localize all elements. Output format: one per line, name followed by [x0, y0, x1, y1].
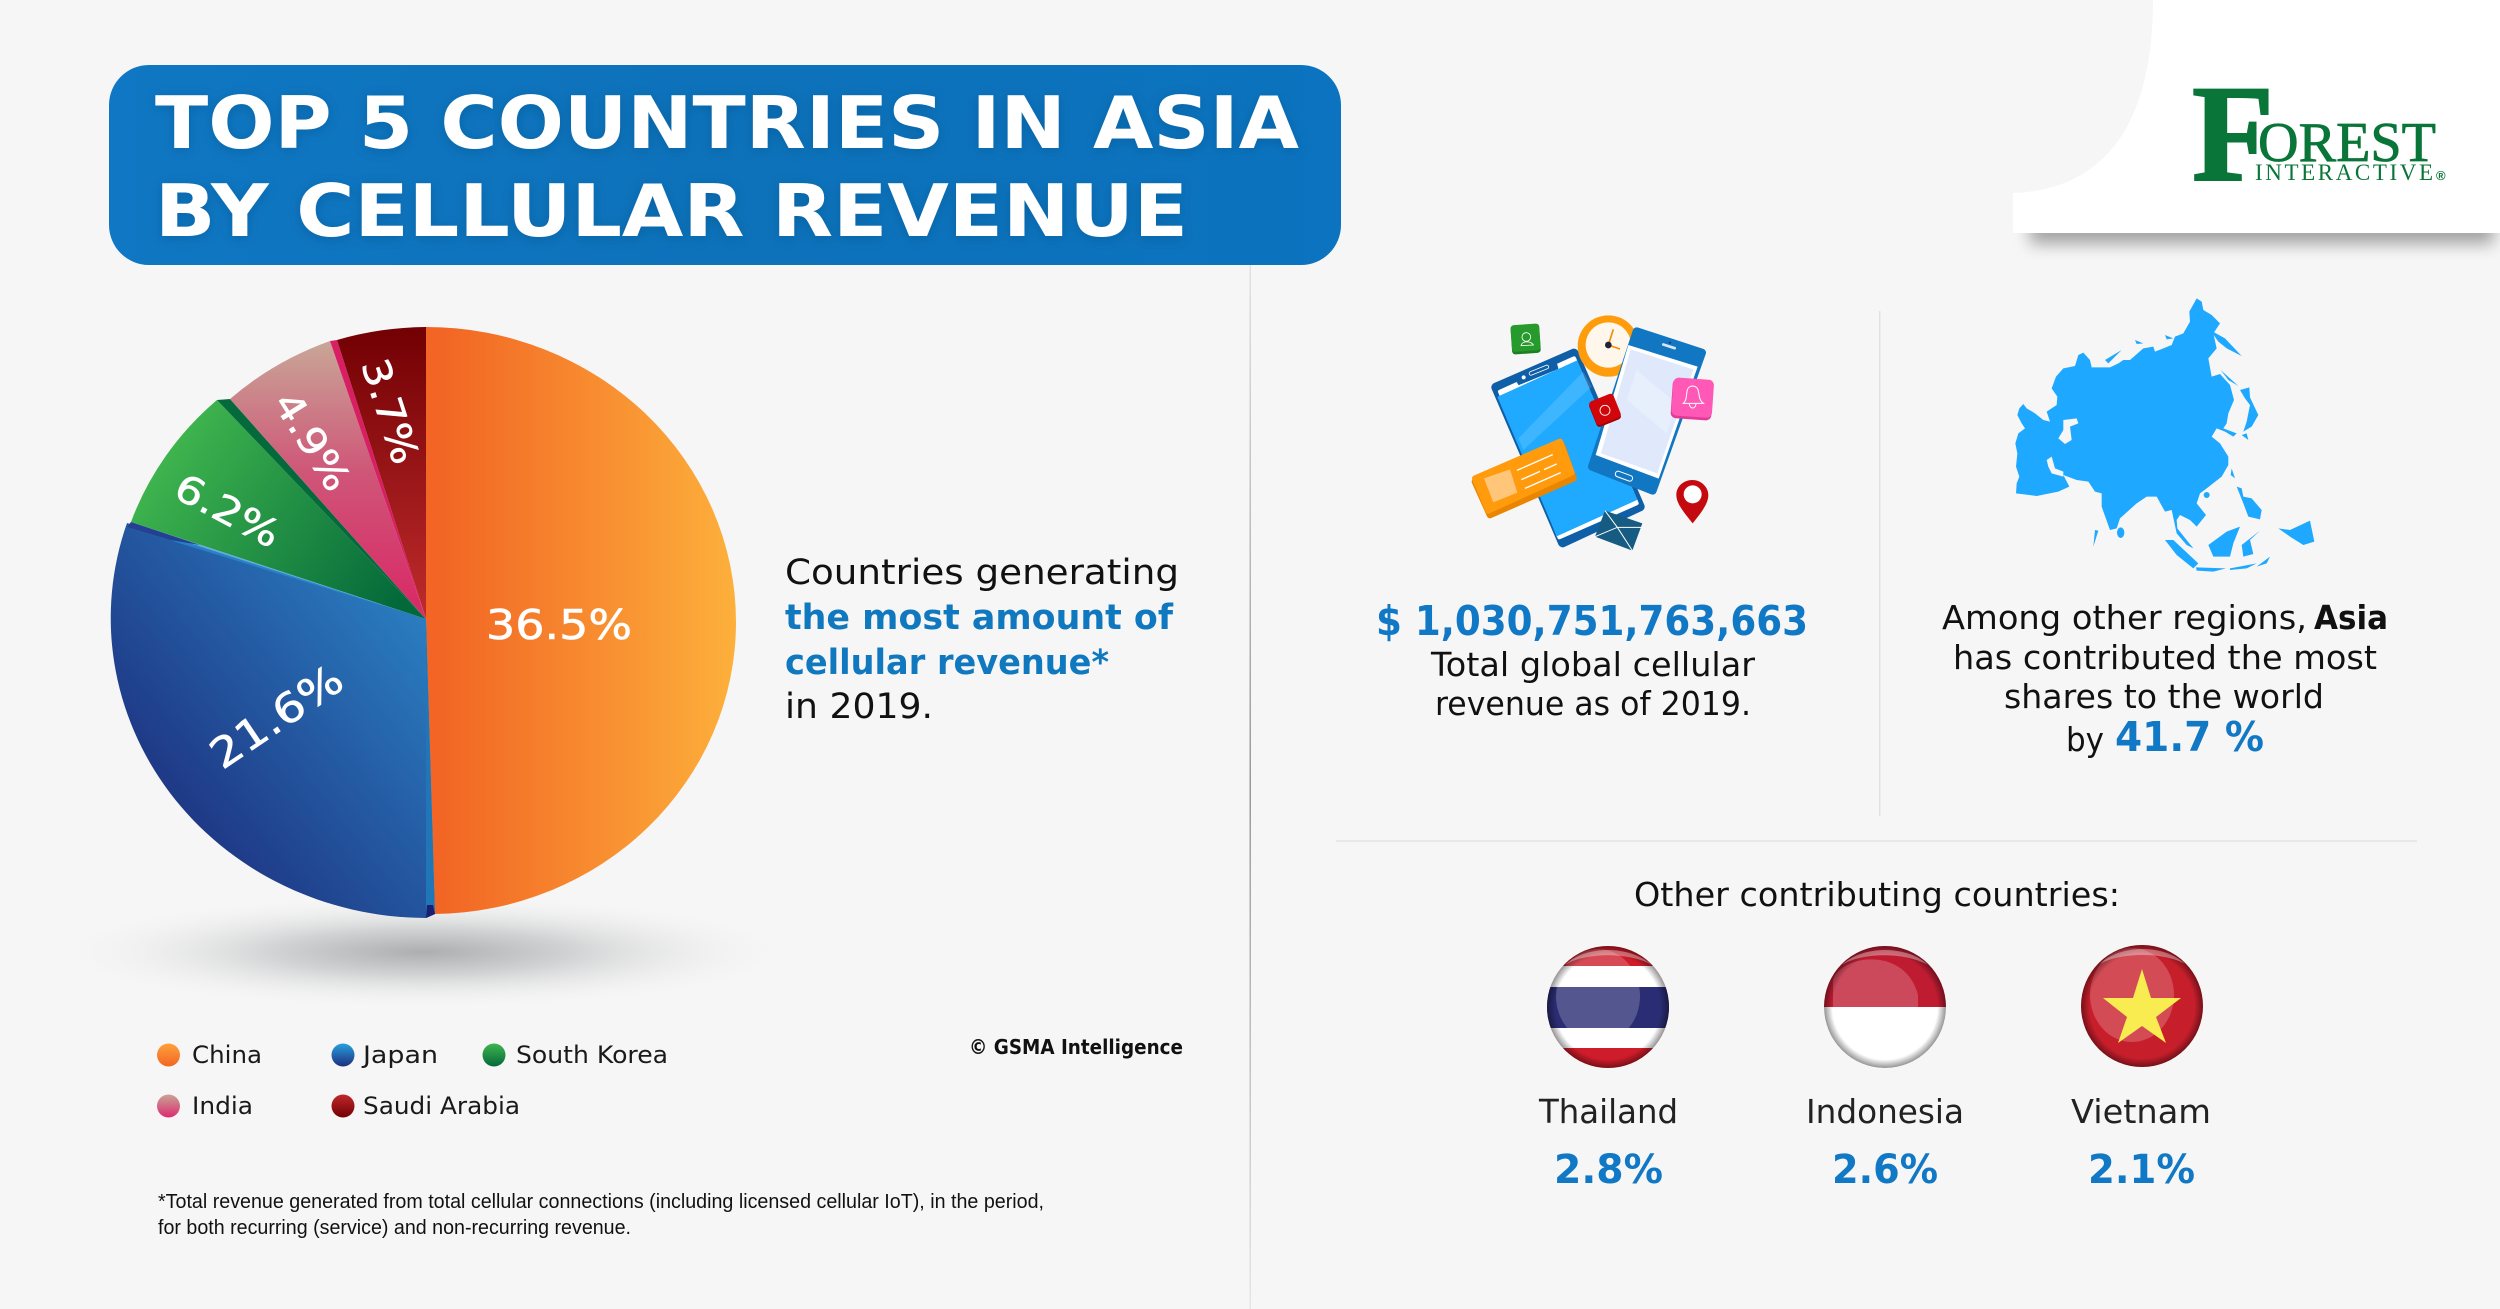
flag: Thailand — [1547, 946, 1669, 1068]
pie labels: 36.5% — [486, 601, 632, 649]
pie labels: 3.7% — [352, 353, 428, 469]
icon: smartphones with apps — [1475, 315, 1714, 551]
Thailand stat: 2.8% — [1554, 1147, 1663, 1193]
legend: Japan: Japan — [361, 1041, 438, 1069]
clock — [1578, 315, 1639, 377]
title text: BY CELLULAR REVENUE — [155, 169, 1188, 253]
title banner — [109, 65, 1341, 265]
total revenue stat — [1376, 597, 1808, 723]
Asia share stat: 41.7 % — [2115, 713, 2264, 761]
legend: India — [157, 1092, 253, 1120]
slice: India 4.9% — [230, 340, 426, 619]
slice: Japan 21.6% — [111, 522, 435, 918]
legend: China: China — [192, 1041, 262, 1069]
legend: Saudi Arabia: Saudi Arabia — [363, 1092, 520, 1120]
chart caption — [785, 553, 1179, 727]
slice: Saudi Arabia 3.7% — [337, 327, 426, 619]
legend: China — [157, 1041, 262, 1069]
total revenue stat: $ 1,030,751,763,663 — [1376, 597, 1808, 645]
title text — [155, 81, 1299, 253]
vertical divider between global revenue and Asia stats — [1879, 311, 1880, 816]
chart caption: in 2019. — [785, 687, 933, 727]
Asia share stat: shares to the world — [2004, 677, 2324, 716]
country labels and values — [1538, 1092, 2211, 1193]
total revenue stat: revenue as of 2019. — [1435, 684, 1751, 723]
icon: map of Asia — [2015, 298, 2314, 572]
legend: South Korea: South Korea — [516, 1041, 668, 1069]
envelope — [1595, 511, 1642, 551]
title text: TOP 5 COUNTRIES IN ASIA — [155, 81, 1299, 165]
logo: Forest Interactive: ® — [2436, 168, 2446, 183]
logo: Forest Interactive: F — [2192, 57, 2274, 210]
other countries heading: Other contributing countries: — [1634, 875, 2120, 914]
slice: South Korea 6.2% — [131, 399, 426, 619]
Asia share stat: by — [2066, 720, 2104, 759]
pie labels: 6.2% — [167, 465, 288, 557]
Asia share stat — [1942, 598, 2388, 761]
Indonesia stat: 2.6% — [1832, 1147, 1938, 1193]
pink bell tile — [1670, 377, 1714, 421]
right phone — [1592, 331, 1702, 491]
Indonesia stat: Indonesia — [1806, 1092, 1964, 1131]
Thailand stat — [1538, 1092, 1678, 1193]
pie chart — [111, 327, 736, 918]
flag: Vietnam — [2080, 940, 2205, 1070]
pie labels: 4.9% — [265, 384, 359, 499]
pie labels: 21.6% — [201, 655, 352, 779]
legend: India: India — [192, 1092, 253, 1120]
green contact tile — [1510, 323, 1541, 355]
Vietnam stat — [2071, 1092, 2211, 1193]
Thailand stat: Thailand — [1538, 1092, 1678, 1131]
location pin — [1676, 480, 1708, 523]
total revenue stat: Total global cellular — [1430, 645, 1755, 684]
legend — [157, 1041, 668, 1120]
vertical divider between left and right halves — [1250, 263, 1251, 1309]
logo panel — [2013, 0, 2500, 244]
footnote: *Total revenue generated from total cellular connections (including licensed cellular IoT), in the period, — [158, 1191, 1044, 1213]
chart caption: the most amount of — [785, 598, 1174, 638]
Asia share stat: has contributed the most — [1953, 638, 2377, 677]
pie chart shadow — [48, 894, 798, 1010]
chart caption: cellular revenue* — [785, 643, 1109, 683]
Vietnam stat: 2.1% — [2088, 1147, 2195, 1193]
left phone — [1496, 353, 1640, 543]
flag: Indonesia — [1824, 946, 1946, 1068]
red camera tile — [1588, 393, 1622, 428]
pie labels — [167, 353, 632, 779]
Asia share stat: Asia — [2314, 598, 2388, 637]
footnote — [158, 1191, 1044, 1239]
legend: Japan — [332, 1041, 438, 1069]
Indonesia stat — [1806, 1092, 1964, 1193]
logo: Forest Interactive — [2192, 57, 2446, 210]
slice: China 36.5% — [426, 327, 736, 914]
Asia share stat: Among other regions, — [1942, 598, 2307, 637]
Vietnam stat: Vietnam — [2071, 1092, 2211, 1131]
orange card — [1475, 442, 1573, 515]
chart caption: Countries generating — [785, 553, 1179, 593]
horizontal divider above other countries — [1336, 840, 2417, 842]
footnote: for both recurring (service) and non-recurring revenue. — [158, 1217, 631, 1239]
logo: Forest Interactive: OREST — [2258, 112, 2436, 174]
logo: Forest Interactive: INTERACTIVE — [2255, 160, 2433, 185]
source credit: © GSMA Intelligence — [969, 1035, 1183, 1059]
